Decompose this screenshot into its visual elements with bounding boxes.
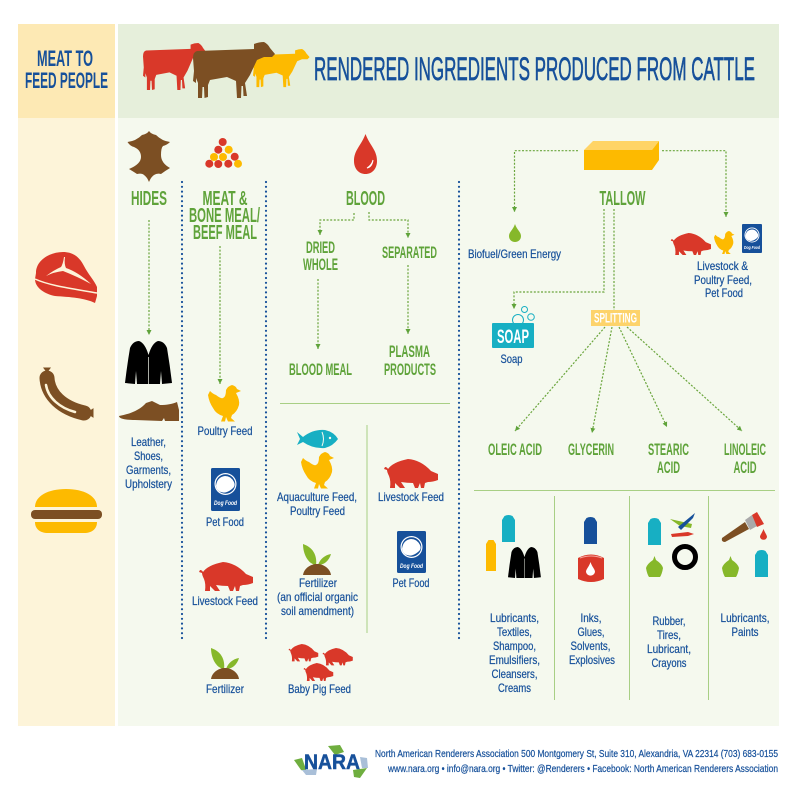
arrow: tallow to feed [662,151,726,217]
arrow: blood to dried whole [320,213,354,235]
heading: dried whole: WHOLE [303,256,338,274]
label: livestock poultry pet food: Poultry Feed, [694,273,752,287]
icon: chicken [301,452,334,488]
heading: dried whole [303,239,338,274]
logo: NARA [294,745,368,778]
footer contact details [375,748,778,775]
heading: meat and bone meal: BONE MEAL/ [189,205,260,227]
panel: title banner [118,24,779,118]
heading: stearic acid [648,441,689,477]
icons: ink bottle and glue can [578,517,604,582]
label: lubricants textiles list: Emulsifiers, [489,653,540,667]
icon: sausage [44,368,93,417]
label: leather goods: Shoes, [134,449,163,463]
heading: plasma products: PRODUCTS [384,361,436,379]
label: poultry feed: Poultry Feed [198,424,252,438]
label: inks glues list: Inks, [580,611,602,625]
column: hides [119,131,179,491]
icon: pet food bag [211,468,240,511]
heading: meat and bone meal: MEAT & [202,188,248,210]
heading: separated: SEPARATED [382,244,437,262]
icon: pet food bag [397,531,426,573]
label: biofuel: Biofuel/Green Energy [468,247,561,261]
arrow: blood to separated [369,212,408,238]
label: baby pig feed: Baby Pig Feed [288,682,351,696]
label: pet food: Pet Food [206,515,244,529]
label: aquaculture and poultry feed: Aquaculture Feed, [277,490,357,504]
heading: meat to feed people: MEAT TO [37,46,93,71]
heading: meat and bone meal [189,188,260,244]
heading: meat to feed people [25,46,108,93]
heading: oleic acid: OLEIC ACID [488,441,542,459]
label: livestock poultry pet food: Livestock & [697,259,748,273]
column: meat and bone meal [189,138,260,696]
icon: pet food bag: Dog Food [400,564,423,570]
icon: pet food bag: Dog Food [744,245,760,250]
label: lubricants paints list: Lubricants, [720,611,770,625]
heading: linoleic acid [724,441,766,477]
label: lubricants textiles list: Textiles, [497,625,532,639]
label: lubricants textiles list: Lubricants, [490,611,539,625]
arrows: splitting to acids [515,327,742,433]
heading: meat and bone meal: BEEF MEAL [193,222,257,244]
panel: rendered ingredients body [118,118,779,726]
label: lubricants paints list [720,611,770,639]
logo: NARA: NARA [304,751,360,774]
heading: hides: HIDES [131,188,167,210]
box: splitting [591,310,640,326]
heading: glycerin: GLYCERIN [568,441,614,459]
icon: steak [35,252,97,303]
icon: hide [128,131,170,182]
label: inks glues list: Glues, [578,625,604,639]
label: fertilizer organic soil amendment: Fertilizer [299,576,337,590]
icon: shoe [119,401,179,421]
heading: tallow: TALLOW [600,188,646,210]
arrow: tallow to splitting [613,209,615,310]
label: rubber tires list: Crayons [652,656,686,670]
icon: soap [492,306,534,348]
label: lubricants textiles list: Cleansers, [492,667,538,681]
label: pet food: Pet Food [392,576,430,590]
label: fertilizer: Fertilizer [206,682,244,696]
panel: meat to feed people header [18,24,115,118]
icon: soap: SOAP [497,327,529,348]
heading: plasma products: PLASMA [389,343,430,361]
icon: plant [303,544,331,575]
column: tallow [468,141,775,700]
label: leather goods: Upholstery [125,477,172,491]
arrow: tallow to soap [514,209,604,309]
label: lubricants textiles list [489,611,540,695]
label: rubber tires list: Lubricant, [647,642,691,656]
icon: biofuel drop [509,224,521,242]
icon: burger [31,489,102,533]
label: rubber tires list: Rubber, [652,614,686,628]
box: splitting: SPLITTING [594,310,637,326]
label: lubricants paints list: Paints [732,625,758,639]
arrow: hides to leather [148,220,150,335]
icon: three cattle [143,42,310,98]
heading: blood: BLOOD [346,188,385,210]
icon: jacket [125,341,172,384]
label: soap: Soap [500,352,523,366]
icon: pig [199,562,253,591]
column: blood [277,134,450,696]
arrow: meal to poultry feed [219,246,221,384]
icon: pig [671,233,711,255]
icon: tallow block [584,141,659,170]
label: livestock poultry pet food [694,259,752,300]
heading: plasma products [384,343,436,379]
icons: rubber tires crayons [646,513,696,577]
icon: pile of meal pellets [205,138,242,168]
icon: pet food bag: Dog Food [214,501,237,507]
arrow: tallow to biofuel [514,151,578,212]
icon: chicken [714,231,734,254]
icon: pet food bag [742,224,762,253]
label: aquaculture and poultry feed: Poultry Feed [290,504,345,518]
label: inks glues list: Explosives [569,653,615,667]
label: livestock feed: Livestock Feed [378,490,444,504]
label: rubber tires list: Tires, [657,628,681,642]
heading: stearic acid: ACID [657,459,680,477]
heading: stearic acid: STEARIC [648,441,689,459]
icon: baby pigs [289,644,353,681]
label: leather goods: Leather, [131,435,166,449]
arrow: dried whole to blood meal [317,279,319,349]
label: fertilizer organic soil amendment: (an official organic [277,590,358,604]
label: inks glues list: Solvents, [570,639,610,653]
icon: fish [297,430,338,448]
heading: meat to feed people: FEED PEOPLE [25,68,108,93]
icon: pig [384,459,438,488]
panel: meat to feed people column [18,118,115,726]
label: leather goods [125,435,172,491]
label: fertilizer organic soil amendment [277,576,358,618]
label: lubricants textiles list: Shampoo, [493,639,536,653]
heading: linoleic acid: ACID [734,459,757,477]
arrow: separated to plasma [407,265,409,334]
label: rubber tires list [647,614,691,670]
label: aquaculture and poultry feed [277,490,357,518]
icon: chicken [208,385,241,422]
icons: paint brush jar bottle [722,512,768,577]
label: lubricants textiles list: Creams [498,681,531,695]
heading: dried whole: DRIED [306,239,335,257]
heading: blood meal: BLOOD MEAL [289,361,352,379]
label: livestock poultry pet food: Pet Food [705,286,743,300]
label: leather goods: Garments, [126,463,171,477]
column dividers [181,182,183,640]
icons: lubricants textiles [486,515,541,578]
icon: plant [211,648,239,679]
label: inks glues list [569,611,615,667]
label: fertilizer organic soil amendment: soil amendment) [281,604,354,618]
label: livestock feed: Livestock Feed [192,594,258,608]
icon: blood drop [354,134,377,174]
